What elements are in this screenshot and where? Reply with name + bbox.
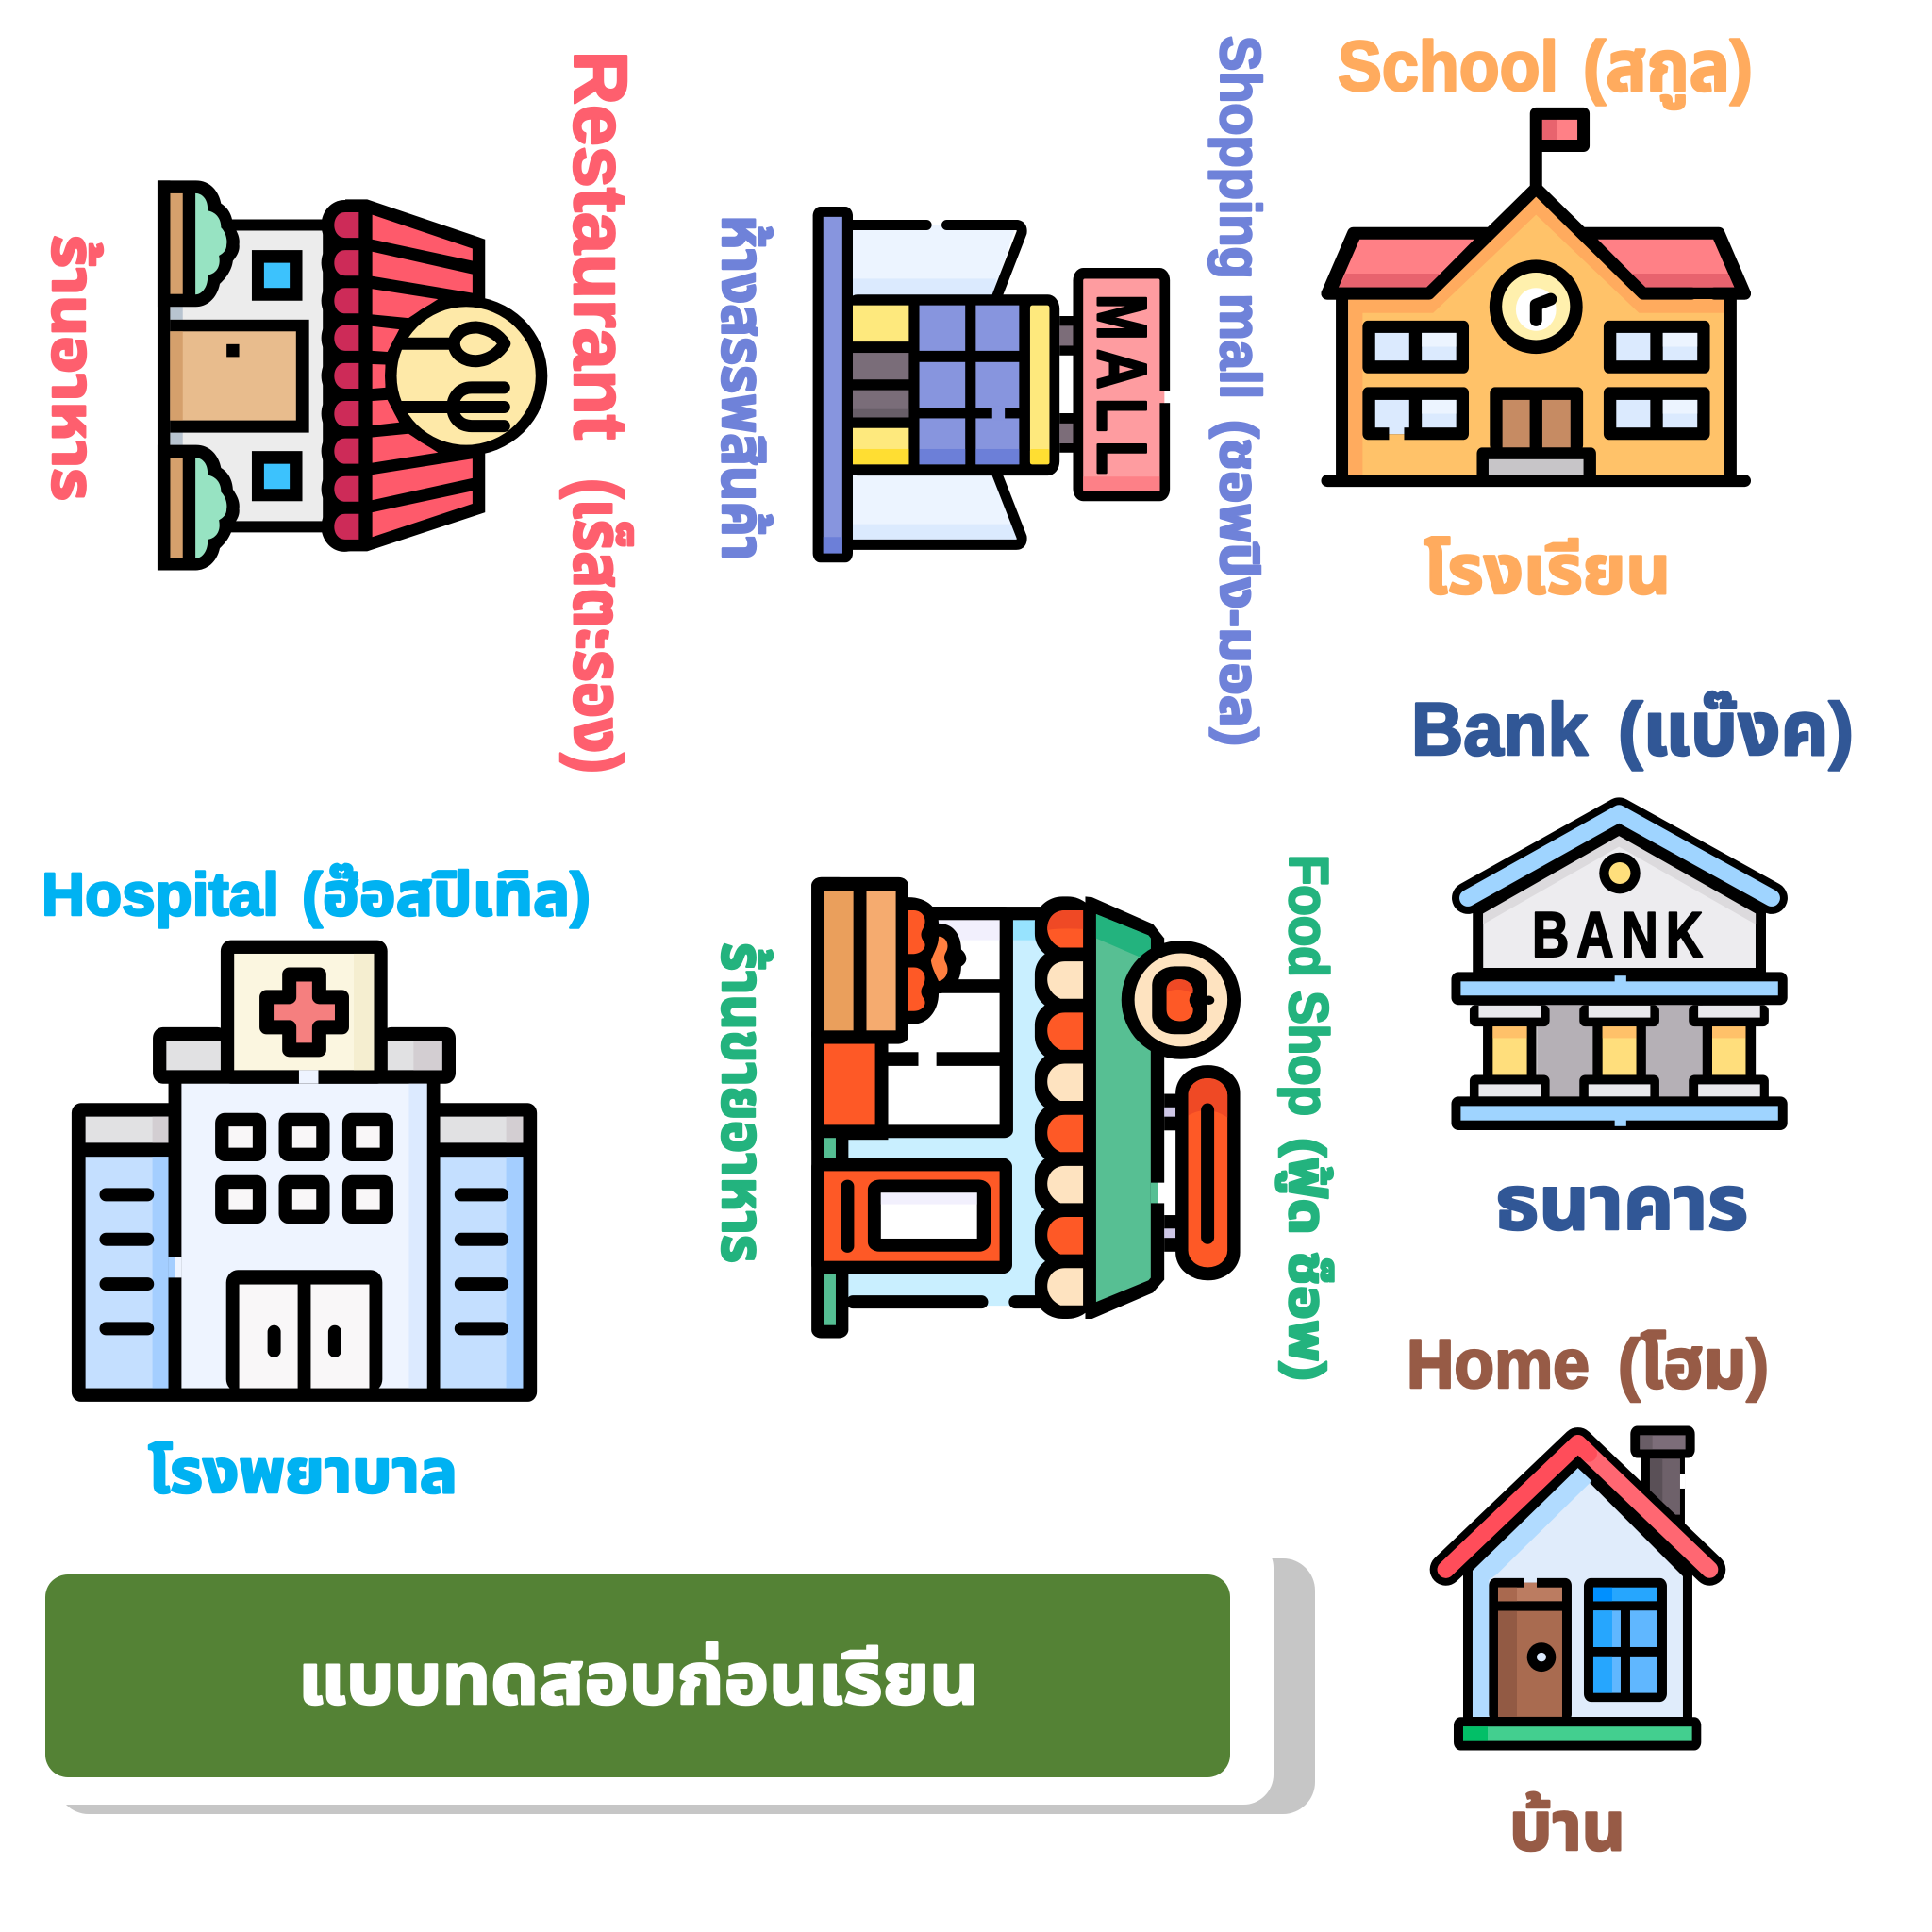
label: Thai shopping mall word: ห้างสรรพสินค้า bbox=[709, 215, 774, 560]
label: Thai school word: โรงเรียน bbox=[1424, 533, 1671, 608]
icon: restaurant bbox=[158, 180, 547, 570]
label: English school word: (สกูล) bbox=[1583, 26, 1753, 109]
banner title: แบบทดสอบก่อนเรียน bbox=[298, 1640, 978, 1720]
label: English food shop word: Food Shop bbox=[1277, 855, 1339, 1116]
banner white card bbox=[19, 1538, 1274, 1805]
label: English hospital word: (ฮ๊อสปิเทิล) bbox=[302, 860, 591, 928]
label: English bank word bbox=[1411, 687, 1854, 771]
panel: restaurant bbox=[40, 51, 642, 774]
icon: shopping mall bbox=[813, 207, 1171, 562]
icon: food shop bbox=[811, 877, 1241, 1339]
label: English bank word: Bank bbox=[1411, 687, 1589, 771]
label: English hospital word bbox=[42, 860, 591, 928]
label: Thai bank word: ธนาคาร bbox=[1495, 1161, 1748, 1245]
panel: school bbox=[1327, 26, 1753, 608]
label: English food shop word: (ฟู้ด ช็อพ) bbox=[1276, 1138, 1335, 1381]
panel: home bbox=[1407, 1326, 1769, 1865]
label: English restaurant word: Restaurant bbox=[558, 51, 642, 440]
panel: food shop bbox=[709, 855, 1339, 1381]
panel: hospital bbox=[42, 860, 591, 1506]
banner shadow bbox=[57, 1558, 1315, 1814]
label: English restaurant word bbox=[558, 51, 642, 774]
banner green box bbox=[45, 1574, 1230, 1777]
label: English bank word: (แบ๊งค) bbox=[1618, 687, 1854, 771]
panel: shopping mall bbox=[709, 36, 1272, 746]
icon: home bbox=[1446, 1426, 1709, 1751]
label: English home word bbox=[1407, 1326, 1769, 1403]
label: English school word: School bbox=[1338, 26, 1558, 106]
label: English home word: (โฮม) bbox=[1618, 1326, 1769, 1403]
panel: bank bbox=[1411, 687, 1854, 1245]
label: Thai food shop word: ร้านขายอาหาร bbox=[709, 942, 774, 1263]
panel: quiz banner bbox=[19, 1538, 1315, 1814]
label: Thai home word: บ้าน bbox=[1509, 1790, 1625, 1865]
label: English shopping mall word: Shopping mall bbox=[1208, 36, 1272, 399]
label: English food shop word bbox=[1276, 855, 1339, 1381]
text: MALL sign: MALL bbox=[1082, 294, 1159, 484]
label: English restaurant word: (เร็สตะรอง) bbox=[559, 478, 635, 774]
label: Thai restaurant word: ร้านอาหาร bbox=[40, 235, 105, 501]
icon: bank bbox=[1451, 813, 1788, 1130]
label: Thai hospital word: โรงพยาบาล bbox=[148, 1438, 458, 1506]
text: BANK sign: BANK bbox=[1532, 899, 1710, 971]
label: English home word: Home bbox=[1407, 1326, 1590, 1403]
label: English shopping mall word bbox=[1208, 36, 1272, 746]
icon: school bbox=[1327, 113, 1745, 481]
label: English hospital word: Hospital bbox=[42, 860, 279, 928]
icon: hospital bbox=[72, 941, 537, 1402]
label: English school word bbox=[1338, 26, 1753, 109]
label: English shopping mall word: (ชอพปิง-มอล) bbox=[1209, 420, 1269, 746]
